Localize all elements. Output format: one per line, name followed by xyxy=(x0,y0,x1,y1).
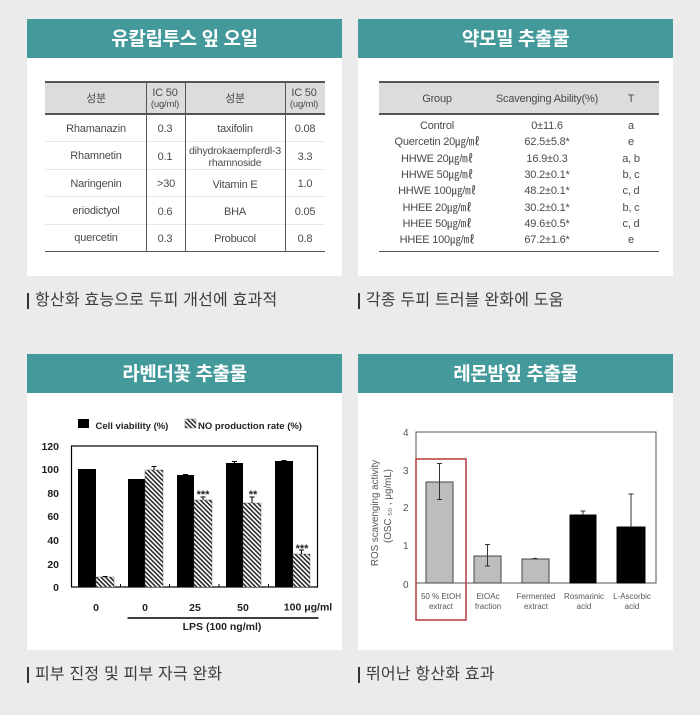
panel: lavender extract xyxy=(27,354,342,650)
table: eucalyptus IC50: 0.08 xyxy=(295,123,315,135)
table: scavenging ability: 49.6±0.5* xyxy=(524,218,570,230)
heading: lemon balm extract xyxy=(358,354,673,393)
table: scavenging ability: Group xyxy=(422,93,452,105)
table: scavenging ability: Control xyxy=(420,120,454,132)
x axis labels: acid xyxy=(625,602,639,611)
table: scavenging ability: b, c xyxy=(623,202,639,214)
significance stars: *** xyxy=(296,543,309,555)
table: scavenging ability: HHEE 100㎍/㎖ xyxy=(400,234,474,246)
heading: lavender extract: 라벤더꽃 추출물 xyxy=(122,364,247,385)
table: scavenging ability: e xyxy=(628,234,634,246)
y axis labels: 60 xyxy=(47,511,59,523)
x axis labels xyxy=(421,592,651,611)
table: eucalyptus IC50: dihydrokaempferdl-3 xyxy=(189,145,281,157)
table: eucalyptus IC50: taxifolin xyxy=(217,123,253,135)
red highlight box xyxy=(416,459,466,620)
table: scavenging ability: 48.2±0.1* xyxy=(524,185,570,197)
significance stars: ** xyxy=(249,489,258,501)
x axis labels: L-Ascorbic xyxy=(613,592,651,601)
table: scavenging ability: HHEE 20㎍/㎖ xyxy=(403,202,471,214)
table: eucalyptus IC50: eriodictyol xyxy=(72,205,120,217)
table: scavenging ability: b, c xyxy=(623,169,639,181)
table: eucalyptus IC50: Probucol xyxy=(214,233,256,245)
y axis labels: 0 xyxy=(53,582,59,594)
table: scavenging ability: e xyxy=(628,136,634,148)
table: scavenging ability: HHEE 50㎍/㎖ xyxy=(403,218,471,230)
heading: lemon balm extract: 레몬밤잎 추출물 xyxy=(453,364,578,385)
heading: lavender extract xyxy=(27,354,342,393)
table: scavenging ability: c, d xyxy=(623,218,639,230)
y axis ticks labels xyxy=(403,428,409,591)
y axis labels: 120 xyxy=(41,441,59,453)
y axis ticks labels: 0 xyxy=(403,580,409,591)
bars xyxy=(78,460,310,587)
table: scavenging ability: 67.2±1.6* xyxy=(524,234,570,246)
panel: buckwheat extract xyxy=(358,19,673,276)
table: eucalyptus IC50: 0.05 xyxy=(295,206,315,218)
heading: eucalyptus leaf oil xyxy=(27,19,342,58)
table: eucalyptus IC50 xyxy=(45,81,325,252)
table: eucalyptus IC50: Vitamin E xyxy=(212,179,258,191)
table: scavenging ability: a, b xyxy=(622,153,640,165)
table: eucalyptus IC50: IC 50 xyxy=(291,87,317,99)
y axis ticks labels: 2 xyxy=(403,503,409,514)
y axis title xyxy=(370,460,394,566)
y axis labels: 100 xyxy=(41,464,59,476)
table: scavenging ability: 62.5±5.8* xyxy=(524,136,570,148)
table: scavenging ability: T xyxy=(628,93,634,105)
x axis labels: extract xyxy=(524,602,549,611)
table: scavenging ability: a xyxy=(628,120,634,132)
table: eucalyptus IC50: 0.8 xyxy=(298,233,312,245)
x axis labels: 0 xyxy=(142,602,148,614)
table: scavenging ability xyxy=(379,81,659,252)
y axis title: ROS scavenging activity xyxy=(370,460,381,566)
table: eucalyptus IC50: Rhamnetin xyxy=(70,150,122,162)
x axis labels: extract xyxy=(429,602,454,611)
x axis labels: Rosmarinic xyxy=(564,592,604,601)
caption: skin soothing: 피부 진정 및 피부 자극 완화 xyxy=(35,666,222,683)
significance stars: *** xyxy=(197,489,210,501)
table: eucalyptus IC50: Rhamanazin xyxy=(66,123,126,135)
table: eucalyptus IC50: rhamnoside xyxy=(209,157,261,169)
table: scavenging ability: 30.2±0.1* xyxy=(524,202,570,214)
caption: antioxidant scalp improvement: 항산화 효능으로 두피 개선에 효과적 xyxy=(35,292,277,309)
table: eucalyptus IC50: 1.0 xyxy=(298,178,312,190)
table: eucalyptus IC50: 성분 xyxy=(225,93,245,105)
legend xyxy=(78,419,302,432)
table: eucalyptus IC50: quercetin xyxy=(74,232,118,244)
x axis labels: EtOAc xyxy=(476,592,500,601)
table: eucalyptus IC50: IC 50 xyxy=(152,87,178,99)
x axis labels: Fermented xyxy=(517,592,555,601)
y axis labels: 20 xyxy=(47,559,59,571)
table: scavenging ability: 30.2±0.1* xyxy=(524,169,570,181)
table: eucalyptus IC50: BHA xyxy=(224,206,246,218)
y axis title: (OSC ₅₀ , μg/mL) xyxy=(383,469,394,543)
table: eucalyptus IC50: Naringenin xyxy=(70,178,122,190)
y axis ticks labels: 4 xyxy=(403,428,409,439)
table: eucalyptus IC50: 0.1 xyxy=(158,151,172,163)
x axis labels: 50 xyxy=(237,602,249,614)
legend: NO production rate (%) xyxy=(198,421,302,432)
error bars xyxy=(437,464,634,566)
x axis labels xyxy=(93,602,332,633)
table: scavenging ability: c, d xyxy=(623,185,639,197)
table: eucalyptus IC50: 3.3 xyxy=(298,151,312,163)
significance stars xyxy=(197,489,309,555)
table: eucalyptus IC50: >30 xyxy=(157,178,175,190)
y axis labels: 40 xyxy=(47,535,59,547)
heading: eucalyptus leaf oil: 유칼립투스 잎 오일 xyxy=(111,29,258,50)
table: scavenging ability: Quercetin 20㎍/㎖ xyxy=(394,136,480,148)
table: eucalyptus IC50: 0.3 xyxy=(158,233,172,245)
x axis labels: 25 xyxy=(189,602,201,614)
panel: eucalyptus leaf oil xyxy=(27,19,342,276)
x axis labels: 0 xyxy=(93,602,99,614)
x axis labels: 100 μg/ml xyxy=(284,602,332,614)
x axis labels: LPS (100 ng/ml) xyxy=(183,621,261,633)
table: scavenging ability: HHWE 100㎍/㎖ xyxy=(398,185,476,197)
y axis labels: 80 xyxy=(47,488,59,500)
table: eucalyptus IC50: 성분 xyxy=(86,93,106,105)
bars xyxy=(426,482,645,583)
panel: lemon balm extract xyxy=(358,354,673,650)
y axis labels xyxy=(41,441,59,594)
heading: buckwheat extract: 약모밀 추출물 xyxy=(462,29,569,50)
y axis ticks labels: 3 xyxy=(403,466,409,477)
x axis labels: acid xyxy=(577,602,591,611)
x axis labels: fraction xyxy=(475,602,501,611)
table: scavenging ability: HHWE 50㎍/㎖ xyxy=(401,169,473,181)
table: scavenging ability: Scavenging Ability(%) xyxy=(496,93,598,105)
caption: scalp trouble relief: 각종 두피 트러블 완화에 도움 xyxy=(366,292,564,309)
table: scavenging ability: 16.9±0.3 xyxy=(526,153,568,165)
heading: buckwheat extract xyxy=(358,19,673,58)
table: scavenging ability: 0±11.6 xyxy=(531,120,563,132)
plot frame and axis xyxy=(72,446,318,587)
y axis ticks labels: 1 xyxy=(403,541,409,552)
legend: Cell viability (%) xyxy=(96,421,168,432)
table: eucalyptus IC50: (ug/ml) xyxy=(290,99,318,110)
table: scavenging ability: HHWE 20㎍/㎖ xyxy=(401,153,473,165)
table: eucalyptus IC50: 0.6 xyxy=(158,206,172,218)
table: eucalyptus IC50: (ug/ml) xyxy=(151,99,179,110)
table: eucalyptus IC50: 0.3 xyxy=(158,123,172,135)
caption: excellent antioxidant effect: 뛰어난 항산화 효과 xyxy=(366,666,495,683)
plot frame xyxy=(416,432,656,583)
x axis labels: 50 % EtOH xyxy=(421,592,461,601)
